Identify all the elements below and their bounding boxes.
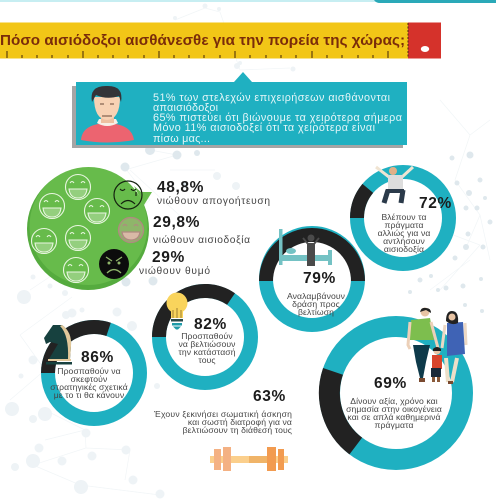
donut: 69%: πράγματα bbox=[374, 420, 414, 430]
statistic: disappointment bbox=[157, 179, 270, 207]
callout panel: 51% των στελεχών επιχειρήσεων αισθάνονται bbox=[153, 92, 391, 104]
callout panel: απαισιόδοξοι bbox=[153, 102, 219, 114]
statistic: disappointment: νιώθουν απογοήτευση bbox=[157, 195, 270, 207]
title ruler banner: Πόσο αισιόδοξοι αισθάνεσθε για την πορεία της χώρας; bbox=[0, 32, 405, 49]
donut: 79% bbox=[266, 229, 358, 325]
donut: 82%: να βελτιώσουν bbox=[178, 339, 236, 349]
donut: 86%: σκεφτούν bbox=[71, 374, 107, 384]
statistic: 63% exercise: και σωστή διατροφή για να bbox=[188, 417, 292, 427]
statistic: anger bbox=[139, 249, 210, 277]
statistic: 63% exercise: Έχουν ξεκινήσει σωματική άσκηση bbox=[153, 409, 292, 419]
statistic: anger: νιώθουν θυμό bbox=[139, 265, 210, 277]
callout panel: πίσω μας... bbox=[153, 133, 210, 145]
donut: 86%: στρατηγικές σχετικά bbox=[50, 382, 128, 392]
icon: dumbbell bbox=[210, 447, 288, 471]
donut: 82%: τους bbox=[198, 355, 216, 365]
donut: 69%: Δίνουν αξία, χρόνο και bbox=[350, 396, 438, 406]
statistic: optimism bbox=[153, 214, 250, 246]
donut: 86%: 86% bbox=[81, 349, 114, 366]
statistic: disappointment: 48,8% bbox=[157, 179, 204, 196]
donut: 69% bbox=[329, 308, 466, 460]
statistic: optimism: 29,8% bbox=[153, 214, 200, 231]
icon: pink smiley bbox=[118, 218, 144, 242]
statistic: anger: 29% bbox=[152, 249, 185, 266]
donut: 72% bbox=[357, 167, 452, 264]
donut: 86% bbox=[44, 325, 140, 419]
donut: 72%: αλλιώς για να bbox=[378, 228, 430, 238]
statistic: 63% exercise: βελτιώσουν τη διάθεσή τους bbox=[183, 425, 292, 435]
donut: 79%: Αναλαμβάνουν bbox=[287, 291, 345, 301]
callout panel bbox=[72, 72, 407, 148]
icon: worried man bbox=[81, 86, 134, 142]
statistic: 63% exercise bbox=[153, 388, 292, 435]
donut: 79%: 79% bbox=[303, 270, 336, 287]
donut: 82% bbox=[159, 291, 251, 383]
icon: person rising from bed bbox=[279, 229, 332, 266]
statistic: optimism: νιώθουν αισιοδοξία bbox=[153, 234, 250, 246]
icon: light bulb bbox=[166, 292, 188, 330]
donut: 72%: αντλήσουν bbox=[383, 236, 425, 246]
smiley faces bbox=[32, 174, 110, 282]
donut: 69%: και σε απλά καθημερινά bbox=[347, 412, 441, 422]
icon: family bbox=[408, 308, 466, 384]
statistic: 63% exercise: 63% bbox=[253, 388, 286, 405]
callout panel: 65% πιστεύει ότι βιώνουμε τα χειρότερα σήμερα bbox=[153, 112, 402, 124]
icon: angry face bbox=[99, 249, 129, 279]
top accent bar bbox=[0, 0, 496, 3]
ruler ticks bbox=[7, 51, 388, 58]
donut: 82%: 82% bbox=[194, 316, 227, 333]
donut: 69%: 69% bbox=[374, 375, 407, 392]
donut: 82%: την κατάστασή bbox=[178, 347, 236, 357]
icon: sad face bbox=[114, 181, 142, 209]
title ruler banner bbox=[0, 22, 441, 58]
donut: 69%: σημασία στην οικογένεια bbox=[346, 404, 442, 414]
donut: 79%: δράση προς bbox=[292, 299, 340, 309]
donut: 72%: αισιοδοξία bbox=[384, 244, 424, 254]
icon: chess knight bbox=[44, 325, 72, 364]
donut: 72%: πράγματα bbox=[384, 220, 424, 230]
donut: 86%: Προσπαθούν να bbox=[57, 366, 121, 376]
speech bubble with emoticons bbox=[27, 167, 152, 290]
donut: 86%: με το τι θα κάνουν bbox=[54, 390, 124, 400]
donut: 79%: βελτίωση bbox=[298, 307, 334, 317]
donut: 72%: 72% bbox=[419, 195, 452, 212]
donut: 72%: Βλέπουν τα bbox=[381, 212, 427, 222]
donut: 82%: Προσπαθούν bbox=[181, 331, 233, 341]
icon: jumping person bbox=[376, 167, 413, 203]
callout panel: Μόνο 11% αισιοδοξεί ότι τα χειρότερα είναι bbox=[153, 122, 376, 134]
